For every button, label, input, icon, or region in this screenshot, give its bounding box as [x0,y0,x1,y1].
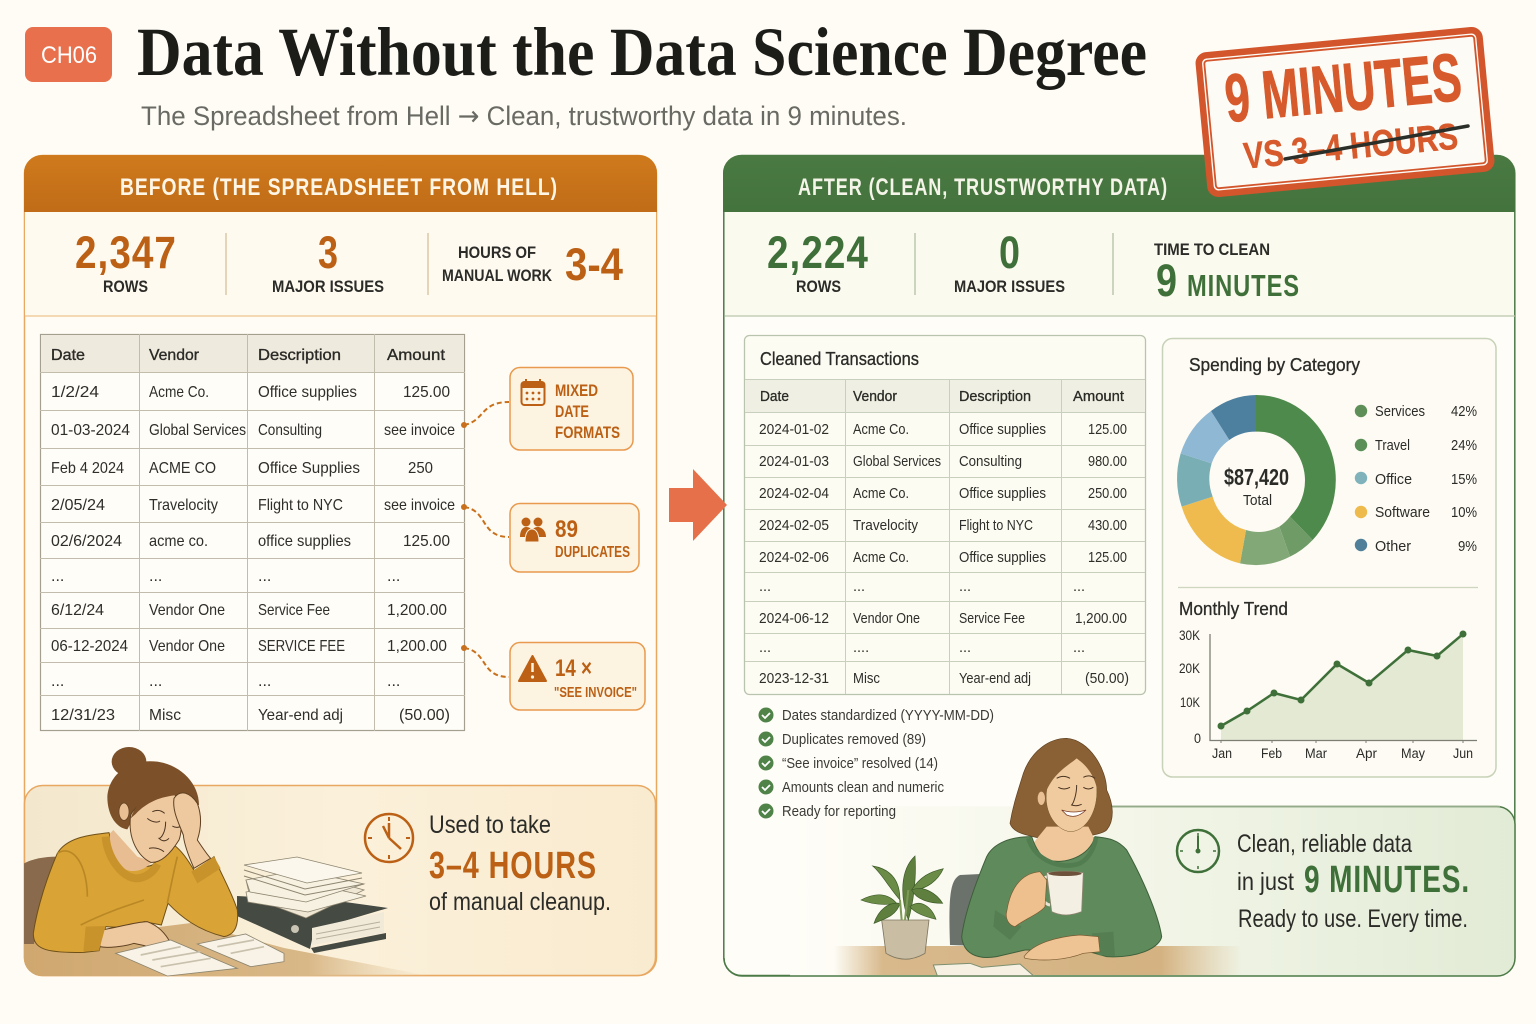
text: used to take: of manual cleanup. [429,888,611,916]
text: clean reliable data [1237,830,1470,933]
after header bar [723,155,1515,212]
stat: rows: 2,224 [767,227,869,278]
hair front [1045,753,1099,797]
icon: plant [861,856,943,959]
table rows: 980.00 [1088,454,1127,470]
table rows: ... [853,579,865,595]
callout: 89 duplicates: 89 [555,516,578,543]
table rows: Feb 4 2024 [51,460,124,477]
stat: time to clean [1154,240,1300,306]
table rows: ... [387,673,400,690]
table rows: ... [1073,640,1085,656]
before stats row [25,212,656,316]
stat: rows: ROWS [103,277,148,296]
table rows: see invoice [384,422,455,439]
hand on desk [1024,935,1100,960]
table rows: (50.00) [1085,671,1129,687]
callout: mixed date formats: DATE [555,402,589,421]
checklist: “See invoice” resolved (14) [782,756,938,772]
line chart: 0 [1194,731,1201,746]
text: clean reliable data: in just [1237,868,1294,896]
neck [1032,827,1095,861]
legend: 42% [1451,403,1477,420]
table rows: 2024-02-06 [759,550,829,566]
text: used to take [429,811,611,916]
right cuff [191,857,221,883]
heading: monthly trend: Monthly Trend [1179,599,1288,619]
messy spreadsheet table [40,334,465,731]
before banner [24,747,656,976]
face [1046,757,1097,832]
stat: time to clean: TIME TO CLEAN [1154,240,1270,259]
stat: rows [767,227,869,296]
line chart: 30K [1179,628,1200,643]
desk [834,946,1242,975]
table rows: Flight to NYC [959,518,1033,534]
table rows: 125.00 [1088,550,1127,566]
left hand [100,922,171,948]
legend: 10% [1451,504,1477,521]
stat: major issues [272,227,384,296]
stat: major issues [954,227,1065,296]
icon: clock [365,814,413,862]
facial features [147,810,183,852]
table rows: acme co. [149,533,208,550]
face [130,793,181,862]
legend: 24% [1451,437,1477,454]
stat: hours of manual work: HOURS OF [458,243,536,262]
table rows: see invoice [384,497,455,514]
stat: hours of manual work: MANUAL WORK [442,266,553,285]
table rows: Misc [853,671,880,687]
checklist: Duplicates removed (89) [782,732,926,748]
bun [112,747,146,776]
table rows: Year-end adj [258,707,343,724]
legend: Office [1375,471,1412,488]
mug handle [1040,877,1050,905]
table rows: 12/31/23 [51,707,115,724]
table rows: 250.00 [1088,486,1127,502]
donut total [1224,464,1289,509]
table rows: ... [387,568,400,585]
stat: time to clean: MINUTES [1187,268,1300,303]
text: used to take: Used to take [429,811,551,839]
table rows: Consulting [258,422,322,439]
hair front [131,786,184,818]
table rows: Vendor One [149,602,225,619]
legend: Other [1375,538,1411,555]
line chart: 20K [1179,661,1200,676]
table rows: Flight to NYC [258,497,343,514]
line chart: Jan [1212,746,1232,761]
table rows: Service Fee [959,611,1025,627]
table rows: 2024-01-03 [759,454,829,470]
legend: 15% [1451,471,1477,488]
sleeve cuffs [993,910,1115,957]
table rows: Acme Co. [853,550,909,566]
line chart: Apr [1356,746,1377,761]
callout: mixed date formats: FORMATS [555,423,620,442]
sweater [33,833,238,952]
table rows: ... [51,673,64,690]
table rows: ... [1073,579,1085,595]
stat: time to clean: 9 [1156,255,1177,306]
table rows: ... [51,568,64,585]
table header: Amount [1073,389,1124,405]
desk papers [116,934,284,976]
title: Data Without the Data Science Degree [137,14,1147,90]
callout: mixed date formats [510,368,633,450]
callout: mixed date formats: MIXED [555,381,598,400]
panel: charts [1162,338,1496,777]
donut total: $87,420 [1224,464,1289,490]
arrow [669,469,727,541]
text: clean reliable data: Clean, reliable data [1237,830,1412,858]
table rows: ... [149,568,162,585]
legend: 9% [1458,538,1477,555]
stat: major issues: MAJOR ISSUES [272,277,384,296]
subtitle: The Spreadsheet from Hell → Clean, trustworthy data in 9 minutes. [141,101,907,132]
table rows: ... [959,640,971,656]
table rows: 250 [408,460,433,477]
stat: hours of manual work: 3-4 [565,239,623,290]
table rows: office supplies [258,533,351,550]
hair [1010,738,1112,839]
chair [949,874,981,946]
table rows: 1/2/24 [51,384,99,401]
donut chart [1177,395,1336,565]
stat: major issues: 3 [318,227,338,278]
text: clean reliable data: Ready to use. Every time. [1238,905,1468,933]
after stats row [725,212,1515,316]
checklist [758,708,994,820]
callout: 89 duplicates: DUPLICATES [555,544,630,561]
callout connectors [461,402,509,677]
table rows: Year-end adj [959,671,1031,687]
table rows: 1,200.00 [1075,611,1127,627]
calm scene illustration [861,738,1162,976]
table rows: Misc [149,707,181,724]
table rows: 01-03-2024 [51,422,130,439]
panel: after [723,155,1515,976]
table rows: 2024-02-04 [759,486,829,502]
panel: before [24,155,657,976]
text: used to take: 3–4 HOURS [429,845,597,887]
table header: Date [760,389,789,405]
table rows: SERVICE FEE [258,638,345,655]
stamp [1198,30,1492,194]
legend [1355,403,1477,555]
table rows: Office supplies [959,422,1046,438]
stressed woman illustration [24,747,284,976]
stamp subline: VS 3–4 HOURS [1242,116,1460,177]
table rows: 430.00 [1088,518,1127,534]
table rows: Office Supplies [258,460,360,477]
callout: see invoice: 14 × [555,655,592,682]
callout: 89 duplicates [510,504,639,572]
hair back [107,761,199,829]
chair [24,857,57,944]
collar [106,837,157,878]
neck [110,830,152,871]
table rows: Office supplies [258,384,357,401]
cleaned transactions table [744,336,1146,694]
before header bar: BEFORE (THE SPREADSHEET FROM HELL) [120,174,558,201]
table rows: ... [759,640,771,656]
paper stack [244,857,366,918]
checklist: Ready for reporting [782,804,896,820]
table rows: .... [853,640,869,656]
line chart [1179,628,1477,761]
table rows: Global Services [149,422,246,439]
table rows: 06-12-2024 [51,638,128,655]
table rows: Vendor One [853,611,920,627]
table rows: ACME CO [149,460,216,477]
hand on head [174,793,211,868]
line chart: Feb [1261,746,1282,761]
callout: see invoice [510,642,645,710]
checklist: Amounts clean and numeric [782,780,944,796]
table rows: Global Services [853,454,941,470]
icon: warning [519,656,546,681]
table rows: Vendor One [149,638,225,655]
hand with mug [1006,872,1047,927]
table rows: Travelocity [853,518,919,534]
icon: calendar [522,379,544,405]
line chart: 10K [1180,695,1200,710]
legend: Software [1375,504,1430,521]
after banner [724,738,1515,976]
line chart: Mar [1305,746,1327,761]
mug [1047,871,1083,915]
stat: major issues: 0 [999,227,1020,278]
table rows: 2024-01-02 [759,422,829,438]
table header: Description [258,347,341,364]
table rows: ... [759,579,771,595]
sweater [962,837,1162,957]
table header: Date [51,347,85,364]
icon: clock [1177,830,1219,872]
table rows: Service Fee [258,602,330,619]
table header [51,347,446,364]
table rows: 125.00 [1088,422,1127,438]
table rows: 1,200.00 [387,602,447,619]
text: clean reliable data: 9 MINUTES. [1304,859,1470,901]
table rows: 2024-06-12 [759,611,829,627]
table header: Amount [387,347,446,364]
stat: hours of manual work [442,239,623,290]
table rows: Office supplies [959,486,1046,502]
table header: Description [959,389,1031,405]
checklist: Dates standardized (YYYY-MM-DD) [782,708,994,724]
strike-through line [1285,126,1468,159]
table rows: 6/12/24 [51,602,104,619]
legend: Services [1375,403,1425,420]
table rows: 2023-12-31 [759,671,829,687]
callout: see invoice: "SEE INVOICE" [554,684,637,701]
eyes, nose and smile [1057,776,1095,806]
stat: major issues: MAJOR ISSUES [954,277,1065,296]
table header: Vendor [853,389,897,405]
heading: spending by category: Spending by Category [1189,355,1360,375]
table rows: Travelocity [149,497,218,514]
table rows: 2024-02-05 [759,518,829,534]
line chart: Jun [1453,746,1473,761]
table rows: 1,200.00 [387,638,447,655]
table title: Cleaned Transactions [760,349,919,369]
table header [760,389,1124,405]
table rows: ... [258,568,271,585]
table header: Vendor [149,347,200,364]
table rows: 2/05/24 [51,497,105,514]
table rows: Acme Co. [149,384,209,401]
donut total: Total [1243,492,1272,509]
table rows [759,422,1129,687]
collar [1028,837,1096,866]
chapter badge [25,27,112,82]
legend: Travel [1375,437,1410,454]
table rows: ... [258,673,271,690]
table rows: 125.00 [403,384,450,401]
chapter badge: CH06 [41,42,97,69]
table rows: Acme Co. [853,422,909,438]
icon: people [520,518,546,542]
stat: rows: ROWS [796,277,841,296]
table rows: Consulting [959,454,1022,470]
table rows: 02/6/2024 [51,533,122,550]
desk [24,923,430,976]
binder [237,896,388,953]
table rows: Office supplies [959,550,1046,566]
table rows [51,384,455,724]
table rows: ... [959,579,971,595]
table rows: ... [149,673,162,690]
line chart: May [1401,746,1425,761]
after header bar: AFTER (CLEAN, TRUSTWORTHY DATA) [798,174,1168,201]
table rows: (50.00) [399,707,450,724]
table rows: Acme Co. [853,486,909,502]
table rows: 125.00 [403,533,450,550]
stat: rows: 2,347 [75,227,177,278]
stat: rows [75,227,177,296]
before header bar [24,155,657,212]
left cuff [83,926,106,952]
book [933,963,1033,976]
